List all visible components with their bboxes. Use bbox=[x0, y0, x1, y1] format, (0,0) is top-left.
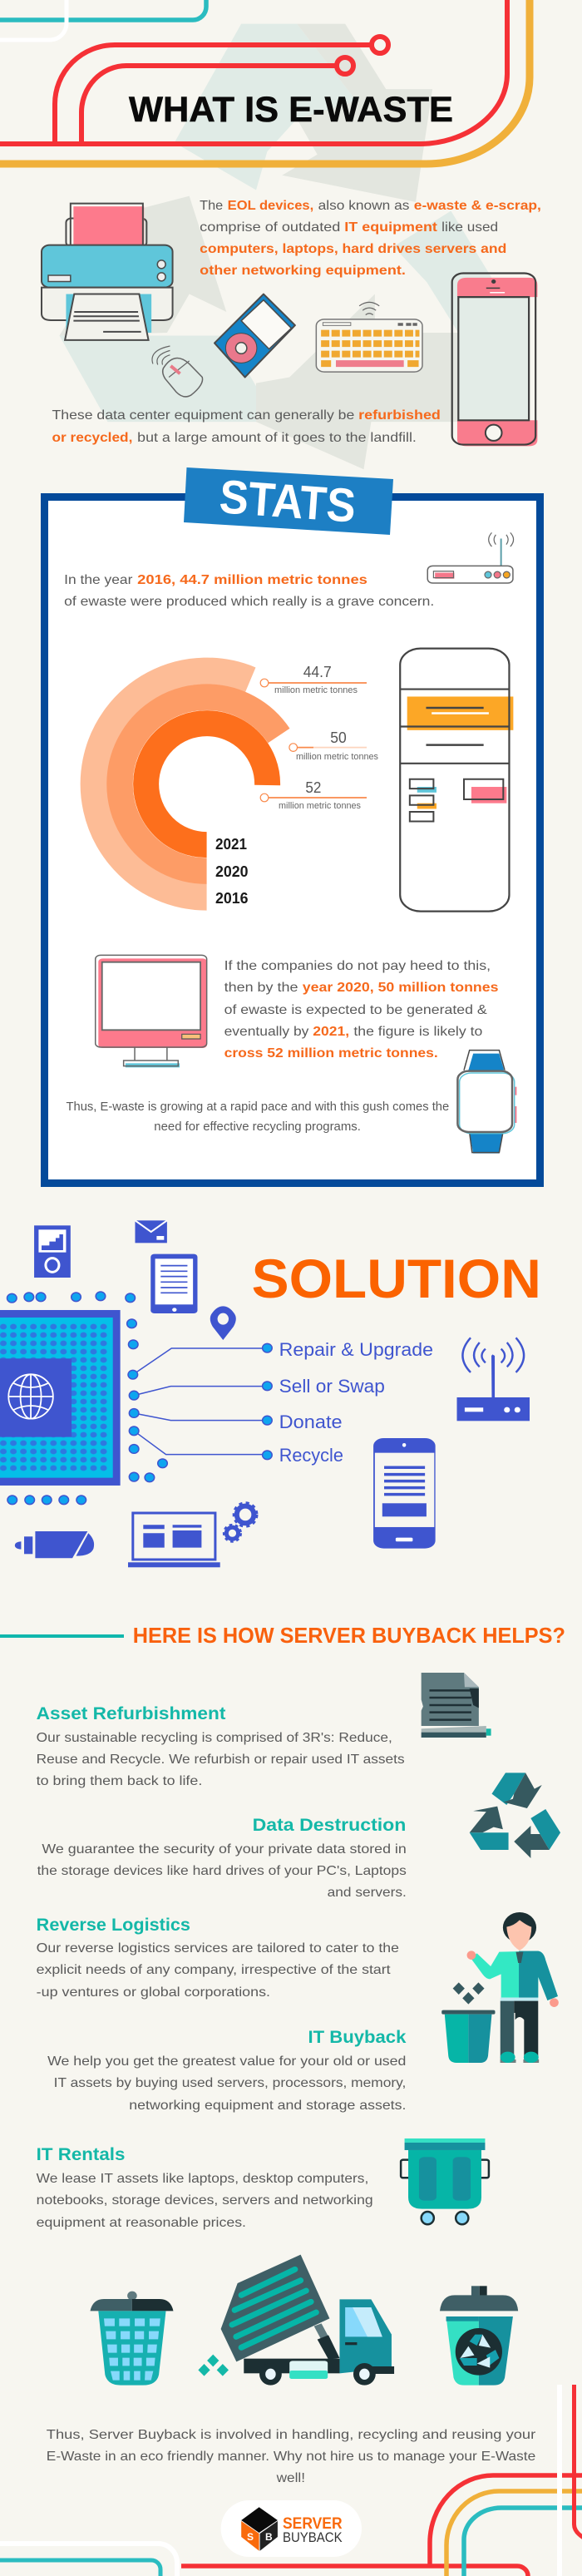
service: it buyback: IT Buyback bbox=[308, 2028, 407, 2047]
service: it buyback: IT assets by buying used servers, processors, memory, bbox=[54, 2076, 406, 2090]
intro text block: IT equipment bbox=[344, 220, 438, 235]
service: it buyback: networking equipment and storage assets. bbox=[129, 2099, 406, 2113]
callout: 50 bbox=[289, 729, 378, 762]
section heading: how server buyback helps: HERE IS HOW SERVER BUYBACK HELPS? bbox=[133, 1623, 565, 1648]
chart labels: years: 2020 bbox=[215, 863, 248, 880]
chip pins bbox=[7, 1292, 167, 1505]
service: reverse logistics: -up ventures or global corporations. bbox=[37, 1985, 270, 2000]
chip bbox=[0, 1310, 121, 1486]
background recycling symbol bbox=[59, 24, 525, 469]
stats text: forecast: cross 52 million metric tonnes. bbox=[224, 1046, 438, 1061]
chart labels: years: 2016 bbox=[215, 890, 248, 907]
intro text block: computers, laptops, hard drives servers and bbox=[200, 242, 506, 256]
icon: router bbox=[427, 532, 514, 583]
connector wires bbox=[128, 1343, 272, 1460]
stats text: forecast: 2021, bbox=[313, 1025, 349, 1039]
closing intro text: These data center equipment can generally be bbox=[52, 408, 354, 423]
icon: smartphone bbox=[452, 274, 537, 446]
icon: usb drive bbox=[15, 1531, 94, 1558]
icon: tablet bbox=[150, 1254, 197, 1313]
service: reverse logistics: explicit needs of any company, irrespective of the start bbox=[37, 1963, 391, 1977]
callout: 50: million metric tonnes bbox=[296, 752, 378, 762]
service: data destruction: We guarantee the security of your private data stored in bbox=[42, 1842, 407, 1857]
closing intro text bbox=[52, 408, 441, 445]
chart labels: years: 2021 bbox=[215, 836, 247, 853]
intro text block: also known as bbox=[318, 199, 409, 213]
service: asset refurbishment: Asset Refurbishment bbox=[37, 1704, 225, 1723]
icon: shredded document bbox=[422, 1673, 491, 1738]
solution options: Sell or Swap bbox=[279, 1376, 385, 1397]
solution options: Donate bbox=[279, 1412, 343, 1432]
stats text: forecast: then by the bbox=[224, 981, 298, 995]
callout: 52 bbox=[260, 779, 367, 811]
icon: music player bbox=[215, 294, 295, 378]
logo cube: S bbox=[247, 2531, 254, 2543]
chart labels: years bbox=[215, 836, 248, 907]
stats text: forecast: of ewaste is expected to be generated & bbox=[224, 1003, 487, 1017]
title: WHAT IS E-WASTE bbox=[129, 90, 453, 130]
logo cube bbox=[241, 2507, 278, 2551]
closing text: Thus, Server Buyback is involved in handling, recycling and reusing your bbox=[47, 2428, 536, 2442]
service: asset refurbishment bbox=[37, 1704, 405, 1788]
stats text: conclusion bbox=[67, 1100, 449, 1134]
stats text: 2016 bbox=[64, 573, 434, 609]
service: it buyback bbox=[47, 2028, 407, 2113]
intro text block: other networking equipment. bbox=[200, 264, 406, 278]
closing intro text: refurbished bbox=[358, 408, 441, 423]
service: it rentals bbox=[37, 2145, 373, 2230]
service: it rentals: IT Rentals bbox=[37, 2145, 125, 2164]
service: reverse logistics: Our reverse logistics services are tailored to cater to the bbox=[37, 1941, 399, 1955]
panel: stats bbox=[45, 467, 540, 1183]
intro text block bbox=[200, 199, 541, 278]
intro text block: like used bbox=[441, 220, 498, 235]
icon: mobile phone bbox=[373, 1438, 436, 1549]
closing text: well! bbox=[276, 2471, 305, 2485]
intro text block: e-waste & e-scrap, bbox=[414, 199, 541, 213]
logo cube: B bbox=[265, 2531, 273, 2543]
stats text: forecast: the figure is likely to bbox=[353, 1025, 482, 1039]
icon: waste basket bbox=[90, 2292, 173, 2386]
stats text: forecast: eventually by bbox=[224, 1025, 308, 1039]
intro text block: The bbox=[200, 199, 223, 213]
service: asset refurbishment: Reuse and Recycle. We refurbish or repair used IT assets bbox=[37, 1753, 405, 1767]
stats text: forecast: If the companies do not pay heed to this, bbox=[224, 959, 491, 973]
icon: mail bbox=[135, 1220, 167, 1243]
service: asset refurbishment: to bring them back to life. bbox=[37, 1774, 202, 1788]
stats text: 2016: of ewaste were produced which really is a grave concern. bbox=[64, 595, 434, 609]
service: data destruction: the storage devices like hard drives of your PC's, Laptops bbox=[37, 1864, 407, 1878]
solution options: Repair & Upgrade bbox=[279, 1339, 433, 1360]
banner: stats heading: STATS bbox=[218, 470, 358, 533]
callout: 52: million metric tonnes bbox=[279, 801, 361, 811]
service: data destruction: Data Destruction bbox=[253, 1816, 406, 1835]
stats text: forecast: year 2020, 50 million tonnes bbox=[303, 981, 499, 995]
stats text: 2016: In the year bbox=[64, 573, 133, 587]
icon: dump truck bbox=[198, 2255, 394, 2386]
service: it rentals: We lease IT assets like laptops, desktop computers, bbox=[37, 2172, 368, 2186]
logo wordmark bbox=[283, 2515, 343, 2545]
heading: solution: SOLUTION bbox=[252, 1248, 541, 1309]
diagram: solution circuit bbox=[0, 1292, 272, 1505]
stats text: conclusion: Thus, E-waste is growing at a rapid pace and with this gush comes the bbox=[67, 1100, 449, 1114]
stats text: 2016: 2016, 44.7 million metric tonnes bbox=[137, 573, 367, 587]
chart: radial bars of e-waste bbox=[94, 671, 279, 897]
icon: smartwatch bbox=[457, 1051, 516, 1154]
service: reverse logistics bbox=[37, 1916, 399, 2000]
callout: 44.7: 44.7 bbox=[303, 664, 332, 680]
callout: 44.7: million metric tonnes bbox=[274, 685, 358, 695]
banner: stats heading bbox=[184, 467, 393, 535]
closing text: E-Waste in an eco friendly manner. Why not hire us to manage your E-Waste bbox=[47, 2450, 535, 2464]
stats text: forecast bbox=[224, 959, 499, 1061]
icon: map pin bbox=[210, 1306, 236, 1340]
stats text: conclusion: need for effective recycling programs. bbox=[154, 1120, 361, 1134]
service: data destruction bbox=[37, 1816, 407, 1900]
logo wordmark: SERVER bbox=[283, 2515, 343, 2533]
logo: server buyback bbox=[221, 2500, 362, 2557]
solution options: Recycle bbox=[279, 1445, 343, 1466]
intro text block: EOL devices, bbox=[228, 199, 313, 213]
icon: laptop with gears bbox=[128, 1503, 256, 1567]
logo wordmark: BUYBACK bbox=[283, 2529, 343, 2545]
intro text block: comprise of outdated bbox=[200, 220, 340, 235]
service: data destruction: and servers. bbox=[328, 1886, 407, 1900]
circuit lines: bottom bbox=[0, 2385, 582, 2576]
closing text bbox=[47, 2428, 536, 2485]
service: it buyback: We help you get the greatest value for your old or used bbox=[47, 2054, 406, 2069]
service: it rentals: equipment at reasonable prices. bbox=[37, 2216, 246, 2230]
icon: wifi router bbox=[457, 1337, 530, 1421]
service: it rentals: notebooks, storage devices, servers and networking bbox=[37, 2193, 373, 2208]
icon: monitor bbox=[96, 955, 207, 1067]
icon: wireless mouse bbox=[152, 346, 203, 397]
callout: 50: 50 bbox=[330, 729, 347, 746]
solution options bbox=[279, 1339, 433, 1466]
closing intro text: but a large amount of it goes to the landfill. bbox=[137, 431, 417, 445]
callout: 44.7 bbox=[260, 664, 367, 695]
icon: recycle symbol bbox=[470, 1773, 560, 1858]
closing intro text: or recycled, bbox=[52, 431, 132, 445]
icon: recycling cup bin bbox=[440, 2286, 518, 2386]
icon: mp3 player bbox=[34, 1225, 71, 1278]
icon: server bbox=[400, 649, 513, 912]
callout: 52: 52 bbox=[305, 779, 321, 796]
icon: keyboard bbox=[316, 302, 422, 372]
circuit lines: top bbox=[0, 0, 530, 164]
service: asset refurbishment: Our sustainable recycling is comprised of 3R's: Reduce, bbox=[37, 1731, 392, 1745]
icon: printer bbox=[42, 204, 173, 340]
icon: wheeled bin bbox=[401, 2138, 489, 2224]
service: reverse logistics: Reverse Logistics bbox=[37, 1916, 190, 1935]
icon: man throwing waste in bin bbox=[441, 1912, 559, 2063]
